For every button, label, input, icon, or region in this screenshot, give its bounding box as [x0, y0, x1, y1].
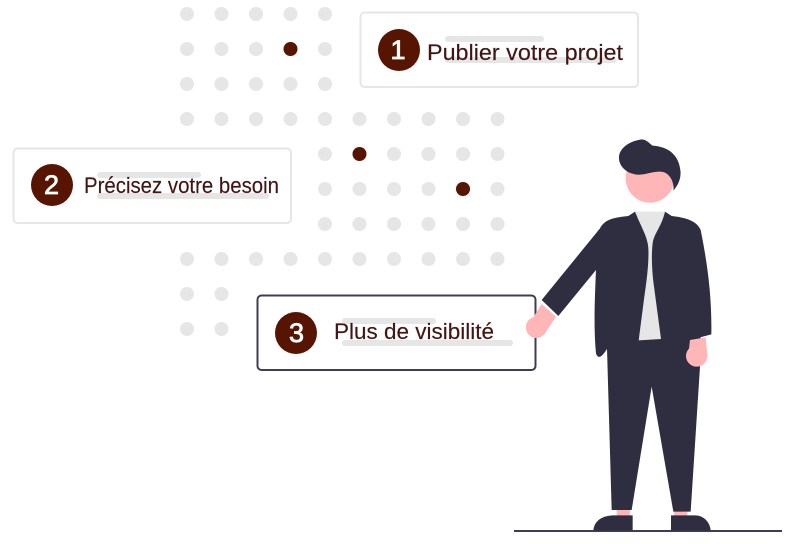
panel: step 3: 3	[289, 318, 304, 348]
panel: step 3: Plus de visibilité	[334, 319, 494, 344]
panel: step 1	[360, 12, 638, 87]
highlighted dots	[284, 42, 470, 196]
panel: step 2: 2	[44, 170, 59, 200]
panel: step 3	[258, 296, 536, 370]
ground line	[514, 530, 782, 532]
panel: step 1: Publier votre projet	[427, 40, 623, 65]
icon: standing person	[526, 139, 711, 531]
panel: step 1: 1	[390, 35, 406, 65]
dot grid background	[180, 7, 504, 336]
panel: step 2	[14, 148, 291, 223]
panel: step 2: Précisez votre besoin	[84, 173, 279, 198]
